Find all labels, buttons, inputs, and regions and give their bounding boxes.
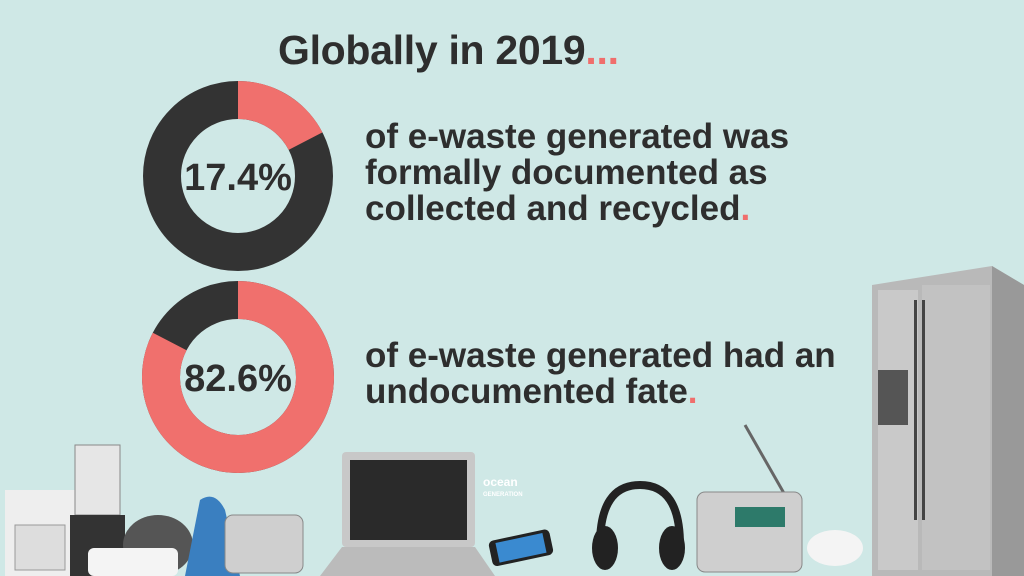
icon: rice cooker (123, 515, 193, 575)
logo: ocean generation (483, 475, 523, 498)
text: undocumented fate: of e-waste generated had an (365, 336, 836, 375)
title: Globally in 2019... (278, 27, 619, 73)
donut chart: 17.4% (143, 81, 333, 271)
text: collected and recycled (365, 117, 789, 228)
logo: ocean generation: ocean (483, 475, 518, 489)
icon: mouse (807, 530, 863, 566)
text: undocumented fate: undocumented fate. (365, 372, 698, 411)
donut chart: 17.4%: 17.4% (184, 157, 292, 199)
logo: ocean generation: GENERATION (483, 492, 523, 498)
icon: blender (70, 445, 125, 576)
icon: laptop (320, 452, 495, 576)
text: undocumented fate (365, 336, 836, 411)
text: collected and recycled: collected and recycled. (365, 189, 750, 228)
icon: coffee maker (5, 490, 75, 576)
icon: headphones (592, 485, 685, 570)
icon: smartphone (488, 529, 554, 567)
icon: iron (185, 497, 240, 576)
icon: refrigerator (872, 266, 1024, 576)
icon: toaster (225, 515, 303, 573)
text: collected and recycled: of e-waste generated was (365, 117, 789, 156)
donut chart: 82.6% (142, 281, 334, 473)
icon: sandwich maker (88, 548, 178, 576)
text: collected and recycled: formally documented as (365, 153, 768, 192)
icon: radio (697, 425, 802, 572)
donut chart: 82.6%: 82.6% (184, 358, 292, 400)
